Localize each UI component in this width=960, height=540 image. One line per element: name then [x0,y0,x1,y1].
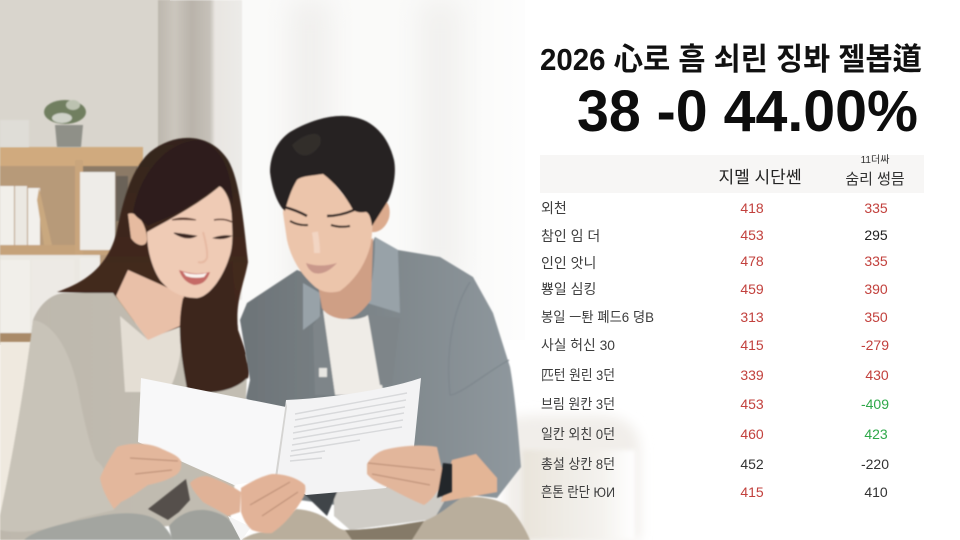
woman: sleeve [0,320,114,532]
man: ear [372,198,390,232]
column: value two: 335 [864,200,888,216]
column: value one: 415 [740,337,764,353]
table header: 지멜 시단쎈 [719,168,801,187]
woman: hair strands beside neck [180,262,248,392]
bookshelf [0,147,143,343]
man: trousers [241,497,530,540]
man: hair [270,116,395,226]
row labels: 인인 앗니 [541,255,596,271]
woman: hair fringe [133,140,233,226]
column: value two: 423 [864,426,888,442]
column: value two: 410 [864,484,888,500]
man: shirt [240,237,521,519]
man: left hand [241,474,305,533]
column: value two: 430 [865,367,889,383]
man: collar [303,237,400,330]
column: value two: 350 [864,309,888,325]
column: value two: 390 [864,281,888,297]
column: value one: 452 [740,456,764,472]
column: value one: 453 [740,227,764,243]
column: value one: 313 [740,309,764,325]
man: lower tee [334,480,444,530]
woman: ear [128,213,147,245]
man: watch [437,463,452,498]
row labels [541,200,654,500]
column: value two: -409 [861,396,889,412]
row labels: 뿅일 심킹 [541,281,596,297]
woman: sweater [0,293,248,540]
row labels: 총설 상칸 8던 [541,456,615,472]
man: tee [323,310,384,395]
headline figure: 38 -0 44.00% [577,79,918,144]
woman: inner top [120,316,181,392]
woman: facial features [172,218,232,285]
hands and watch [100,444,452,533]
column: value two: 295 [864,227,888,243]
man: facial features [284,207,354,274]
column: value one: 478 [740,253,764,269]
woman: face [147,186,232,298]
row labels: 브림 원칸 3던 [541,396,615,412]
woman: trousers [24,513,172,540]
row labels: 匹턴 원린 3던 [541,367,615,383]
column: value one: 460 [740,426,764,442]
finger lines [130,458,435,516]
man [240,116,530,540]
column: value one: 453 [740,396,764,412]
row labels: 외천 [541,200,567,216]
table header: 11더싸 [861,154,889,166]
man: forearm [441,454,497,502]
table header: 숨리 썽믐 [845,171,905,188]
man: hair highlight [292,134,321,156]
plant and box on shelf [0,100,86,147]
sofa [0,342,640,540]
column: value one: 418 [740,200,764,216]
man: sleeve seam [449,282,509,395]
man: button [319,368,327,377]
table header [540,154,924,193]
man: trouser shadow [345,521,424,540]
column: value one [740,200,764,500]
column: value one: 415 [740,484,764,500]
title: 2026 心로 흠 쇠린 징봐 젤봅道 [540,42,922,77]
row labels: 일칸 외친 0던 [541,426,615,442]
column: value one: 459 [740,281,764,297]
column: value two: 335 [864,253,888,269]
column: value two [861,200,889,500]
man: neck [318,238,373,319]
table [540,154,924,500]
woman: hair back [57,138,249,393]
white paper corner under hands [228,516,251,540]
man: right hand [367,446,444,505]
shadow between arms [148,479,190,520]
woman [0,138,249,540]
column: value two: -279 [861,337,889,353]
document held by couple [138,378,421,495]
woman: right hand [100,444,181,509]
woman: neck [116,270,184,340]
row labels: 사실 허신 30 [541,337,615,353]
row labels: 참인 임 더 [541,228,600,244]
man: placket [313,312,400,395]
row labels: 봉일 ㅡ퇀 폐드6 뎡B [541,309,654,325]
woman: left hand [190,476,241,516]
row labels: 흔톤 란단 ЮИ [541,484,615,500]
man: face [283,170,372,292]
column: value two: -220 [861,456,889,472]
column: value one: 339 [740,367,764,383]
man: shadow under paper [300,490,338,516]
